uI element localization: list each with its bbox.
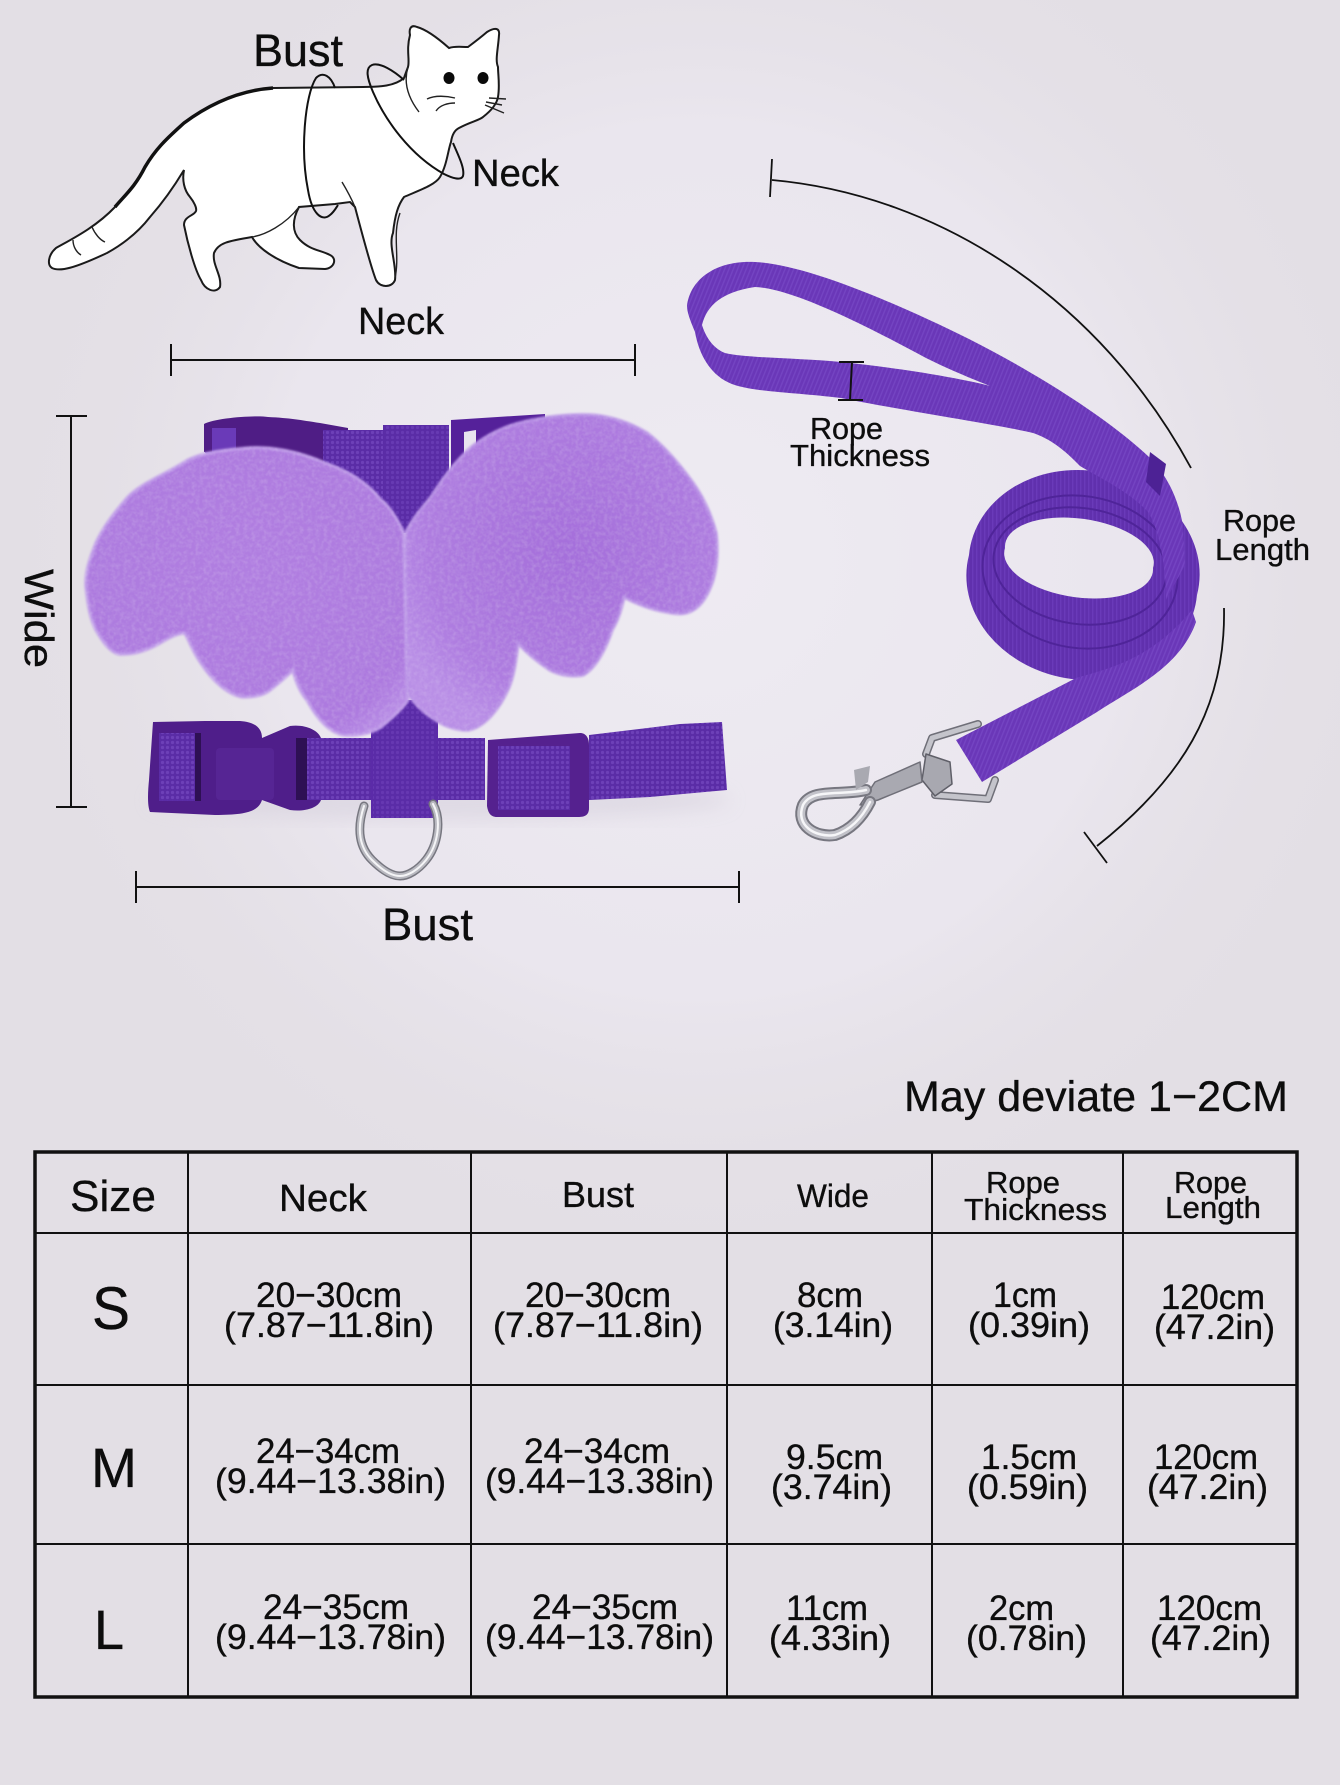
table header row: Neck bbox=[279, 1178, 368, 1220]
size S row: 8cm bbox=[797, 1276, 863, 1315]
label: rope length bbox=[1215, 503, 1310, 567]
label: rope length: Rope bbox=[1223, 503, 1296, 538]
buckle window and strap bbox=[159, 733, 321, 801]
metal D-ring bbox=[360, 804, 438, 876]
wide dimension label: Wide bbox=[16, 569, 62, 668]
metal snap clip bbox=[801, 724, 995, 835]
bust measuring loop bbox=[304, 75, 338, 217]
left side-release buckle bbox=[148, 721, 321, 815]
size S row: S bbox=[92, 1275, 130, 1342]
table header row: Wide bbox=[797, 1178, 869, 1214]
rope length arc upper bbox=[770, 159, 1191, 468]
clip hook shadow bbox=[801, 790, 870, 835]
neck measuring loop bbox=[368, 64, 463, 179]
size table bbox=[35, 1152, 1297, 1697]
harness with plush wings bbox=[86, 414, 730, 876]
bust dimension line bbox=[136, 871, 739, 903]
cat outline bbox=[49, 26, 499, 291]
size L row: 24−35cm bbox=[263, 1588, 409, 1627]
neck dimension label: Neck bbox=[358, 301, 445, 343]
size M row: 9.5cm bbox=[786, 1438, 883, 1477]
wide dimension bbox=[16, 416, 87, 807]
clip hook bbox=[801, 790, 870, 835]
size M row: 24−34cm bbox=[524, 1432, 670, 1471]
lower leash strap bbox=[956, 610, 1196, 782]
size L row: 2cm bbox=[989, 1589, 1054, 1628]
size L row bbox=[94, 1588, 1271, 1661]
size S row: 1cm bbox=[993, 1276, 1057, 1315]
right plush wing bbox=[406, 415, 717, 730]
size M row: (0.59in) bbox=[967, 1468, 1088, 1507]
size M row: (47.2in) bbox=[1147, 1468, 1268, 1507]
left plush wing bbox=[86, 448, 408, 735]
size L row: 120cm bbox=[1157, 1589, 1262, 1628]
size M row: 1.5cm bbox=[981, 1438, 1077, 1477]
size L row: (9.44−13.78in) bbox=[215, 1618, 446, 1657]
bust dimension label: Bust bbox=[382, 899, 473, 950]
leash handle loop bbox=[687, 262, 1185, 600]
coil of leash bbox=[966, 470, 1200, 680]
clip swivel frame shadow bbox=[926, 724, 995, 799]
size S row: (7.87−11.8in) bbox=[224, 1306, 434, 1345]
size S row: (0.39in) bbox=[968, 1306, 1090, 1345]
purple leash bbox=[687, 159, 1310, 863]
table header row: Rope bbox=[1174, 1165, 1247, 1200]
size L row: L bbox=[94, 1598, 124, 1661]
table header row: Length bbox=[1165, 1190, 1261, 1225]
neck dimension bbox=[171, 301, 635, 376]
lower strap bbox=[307, 700, 727, 818]
size M row: (9.44−13.38in) bbox=[485, 1462, 714, 1501]
table header row bbox=[70, 1165, 1261, 1227]
label: neck on cat: Neck bbox=[472, 153, 560, 195]
neck dimension line bbox=[171, 344, 635, 376]
table header row: Size bbox=[70, 1172, 156, 1221]
size M row: 120cm bbox=[1154, 1438, 1258, 1477]
rope thickness marker bbox=[838, 362, 864, 400]
label: rope thickness bbox=[790, 411, 930, 473]
table grid bbox=[35, 1152, 1297, 1697]
size L row: (4.33in) bbox=[769, 1619, 891, 1658]
size S row bbox=[92, 1275, 1275, 1347]
size S row: 120cm bbox=[1161, 1278, 1265, 1317]
size L row: (0.78in) bbox=[966, 1619, 1087, 1658]
rope length arc lower bbox=[1084, 608, 1224, 863]
table header row: Bust bbox=[562, 1174, 634, 1215]
label: rope length: Length bbox=[1215, 532, 1310, 567]
size M row: (3.74in) bbox=[771, 1468, 892, 1507]
coil strand lines bbox=[971, 482, 1189, 662]
table header row: Thickness bbox=[964, 1192, 1107, 1227]
clip swivel frame bbox=[926, 724, 995, 799]
clip swivel body bbox=[922, 754, 952, 796]
size L row: (9.44−13.78in) bbox=[485, 1618, 714, 1657]
size S row: (7.87−11.8in) bbox=[493, 1306, 703, 1345]
harness soft shadow bbox=[150, 780, 730, 820]
label: rope thickness: Rope bbox=[810, 411, 883, 446]
upper strap and buckles bbox=[204, 414, 545, 533]
size M row bbox=[91, 1432, 1268, 1507]
table header row: Rope bbox=[986, 1165, 1060, 1200]
size L row: (47.2in) bbox=[1150, 1619, 1271, 1658]
size S row: 20−30cm bbox=[525, 1276, 671, 1315]
size M row: (9.44−13.38in) bbox=[215, 1462, 446, 1501]
cat eyes bbox=[444, 72, 488, 84]
bust dimension bbox=[136, 871, 739, 950]
cat inner details bbox=[73, 67, 506, 278]
handle stitching bbox=[1146, 452, 1166, 496]
cat measurement diagram bbox=[49, 25, 560, 291]
clip hook highlight bbox=[801, 790, 870, 835]
clip bar bbox=[860, 762, 922, 805]
label: rope thickness: Thickness bbox=[790, 438, 930, 473]
slider window bbox=[498, 746, 570, 810]
size M row: M bbox=[91, 1436, 137, 1499]
wide dimension line bbox=[56, 416, 87, 807]
size S row: (3.14in) bbox=[773, 1306, 893, 1345]
label: bust: Bust bbox=[253, 25, 343, 76]
square slider buckle bbox=[487, 733, 589, 817]
deviation note: May deviate 1−2CM bbox=[904, 1073, 1288, 1121]
size L row: 11cm bbox=[786, 1589, 868, 1628]
hook latch bbox=[854, 766, 870, 790]
size S row: 20−30cm bbox=[256, 1276, 402, 1315]
size S row: (47.2in) bbox=[1154, 1308, 1275, 1347]
size L row: 24−35cm bbox=[532, 1588, 678, 1627]
size M row: 24−34cm bbox=[256, 1432, 400, 1471]
cat back emphasis line bbox=[115, 88, 273, 207]
